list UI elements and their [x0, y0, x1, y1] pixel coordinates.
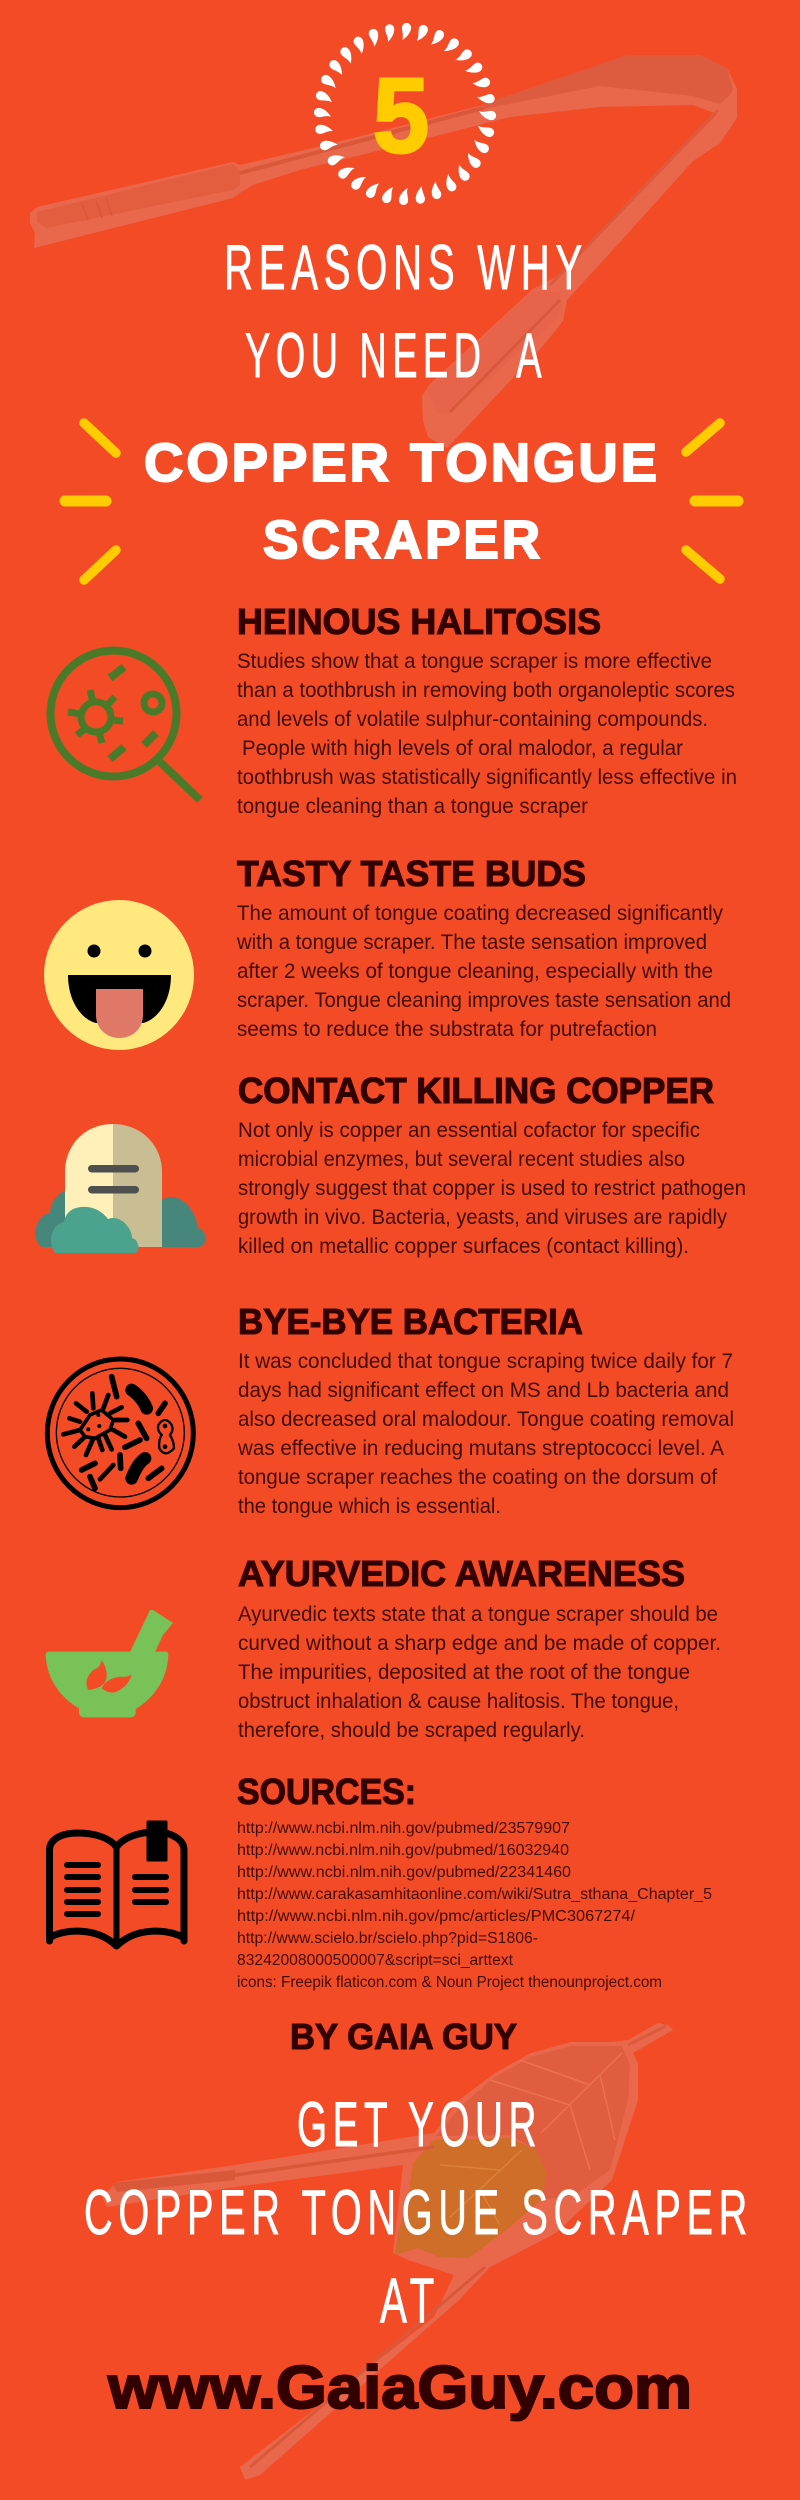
icon: petri dish with bacteria	[47, 1359, 193, 1508]
icon: open book with bookmark	[50, 1822, 184, 1946]
icon: smiling face with tongue	[44, 900, 194, 1050]
call to action text	[84, 2090, 753, 2336]
heading: HEINOUS HALITOSIS	[237, 601, 601, 642]
panel: heinous halitosis	[50, 601, 737, 818]
source list: http://www.ncbi.nlm.nih.gov/pubmed/22341460	[237, 1864, 571, 1881]
body text	[236, 901, 731, 1041]
heading: TASTY TASTE BUDS	[237, 853, 586, 894]
body text: was effective in reducing mutans streptococci level. A	[237, 1436, 725, 1460]
decorative yellow rays	[65, 423, 738, 580]
icon: magnifier over germs	[50, 650, 200, 800]
body text: tongue cleaning than a tongue scraper	[237, 794, 588, 818]
body text: Ayurvedic texts state that a tongue scraper should be	[238, 1602, 718, 1626]
title: reasons why you need a	[224, 233, 588, 391]
source list: http://www.ncbi.nlm.nih.gov/pmc/articles/PMC3067274/	[237, 1908, 636, 1925]
number 5: 5	[373, 57, 429, 175]
droplet ring	[314, 23, 496, 205]
panel: contact killing copper	[35, 1070, 746, 1258]
body text: strongly suggest that copper is used to restrict pathogen	[238, 1176, 746, 1200]
body text: days had significant effect on MS and Lb bacteria and	[238, 1378, 729, 1402]
body text: microbial enzymes, but several recent studies also	[238, 1147, 685, 1171]
panel: tasty taste buds	[44, 853, 731, 1050]
body text: killed on metallic copper surfaces (contact killing).	[238, 1234, 689, 1258]
body text: after 2 weeks of tongue cleaning, especially with the	[237, 959, 713, 983]
panel: ayurvedic awareness	[46, 1553, 721, 1742]
body text	[237, 1349, 734, 1518]
title: copper tongue scraper: SCRAPER	[263, 510, 543, 570]
body text	[237, 649, 737, 818]
heading: AYURVEDIC AWARENESS	[238, 1553, 685, 1594]
icon: mortar and pestle with leaves	[46, 1610, 173, 1717]
body text: growth in vivo. Bacteria, yeasts, and viruses are rapidly	[238, 1205, 727, 1229]
source list: http://www.ncbi.nlm.nih.gov/pubmed/23579907	[237, 1820, 570, 1837]
source list: http://www.scielo.br/scielo.php?pid=S1806-	[237, 1930, 538, 1947]
body text: The impurities, deposited at the root of the tongue	[238, 1660, 690, 1684]
body text: with a tongue scraper. The taste sensation improved	[236, 930, 707, 954]
badge: ring of droplets with number 5	[314, 23, 496, 205]
title: copper tongue scraper	[144, 433, 660, 570]
heading: SOURCES:	[237, 1771, 416, 1812]
source list	[237, 1820, 712, 1991]
source list: 83242008000500007&script=sci_arttext	[237, 1952, 514, 1969]
illustration: top copper tongue scraper	[30, 55, 737, 448]
heading: BYE-BYE BACTERIA	[238, 1301, 583, 1342]
body text: toothbrush was statistically significantly less effective in	[237, 765, 737, 789]
body text	[238, 1118, 746, 1258]
body text: the tongue which is essential.	[238, 1494, 501, 1518]
body text: People with high levels of oral malodor, a regular	[242, 736, 683, 760]
body text: than a toothbrush in removing both organoleptic scores	[237, 678, 735, 702]
body text: seems to reduce the substrata for putrefaction	[237, 1017, 657, 1041]
illustration: bottom scraper and leaf	[102, 2023, 673, 2480]
body text	[238, 1602, 721, 1742]
body text: also decreased oral malodour. Tongue coating removal	[238, 1407, 734, 1431]
title: copper tongue scraper: COPPER TONGUE	[144, 433, 660, 493]
body text: scraper. Tongue cleaning improves taste sensation and	[237, 988, 731, 1012]
title: reasons why you need a: REASONS WHY	[224, 233, 588, 303]
icon: tombstone with bushes	[35, 1124, 206, 1253]
heading: CONTACT KILLING COPPER	[238, 1070, 714, 1111]
website url: www.GaiaGuy.com	[107, 2354, 692, 2421]
byline: BY GAIA GUY	[290, 2016, 517, 2057]
call to action text: GET YOUR	[297, 2090, 542, 2160]
body text: tongue scraper reaches the coating on the dorsum of	[238, 1465, 717, 1489]
source list: icons: Freepik flaticon.com & Noun Project thenounproject.com	[237, 1974, 662, 1991]
call to action text: AT	[380, 2266, 440, 2336]
body text: and levels of volatile sulphur-containing compounds.	[237, 707, 708, 731]
title: reasons why you need a: YOU NEED A	[245, 321, 547, 391]
body text: Studies show that a tongue scraper is more effective	[237, 649, 712, 673]
panel: sources	[50, 1771, 712, 1991]
source list: http://www.carakasamhitaonline.com/wiki/Sutra_sthana_Chapter_5	[237, 1886, 712, 1903]
panel: bye-bye bacteria	[47, 1301, 734, 1518]
body text: The amount of tongue coating decreased significantly	[237, 901, 723, 925]
source list: http://www.ncbi.nlm.nih.gov/pubmed/16032940	[237, 1842, 569, 1859]
body text: It was concluded that tongue scraping twice daily for 7	[238, 1349, 733, 1373]
body text: curved without a sharp edge and be made of copper.	[238, 1631, 721, 1655]
body text: Not only is copper an essential cofactor for specific	[238, 1118, 700, 1142]
body text: therefore, should be scraped regularly.	[238, 1718, 585, 1742]
body text: obstruct inhalation & cause halitosis. The tongue,	[238, 1689, 679, 1713]
